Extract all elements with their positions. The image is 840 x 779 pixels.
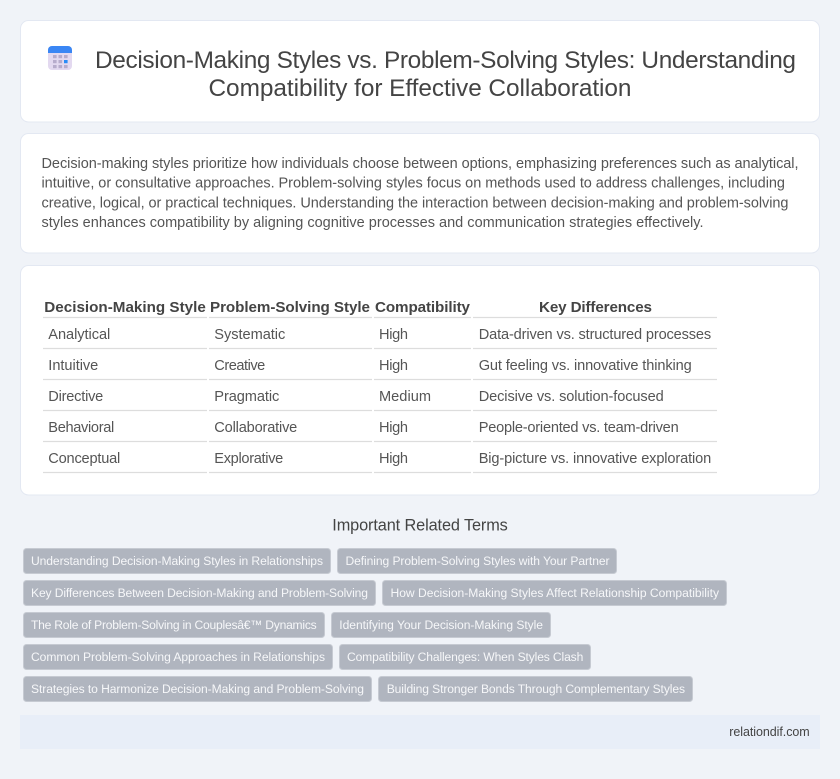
text block: description: styles enhances compatibility by aligning cognitive processes and communication strategies effectively. (42, 215, 704, 231)
tag: identifying your style: Identifying Your Decision-Making Style (339, 618, 543, 632)
related terms tags (24, 548, 726, 702)
heading: important related terms: Important Related Terms (332, 517, 508, 535)
table row: behavioral: Behavioral (48, 420, 114, 436)
table row: analytical: Data-driven vs. structured processes (479, 327, 711, 343)
table row: analytical: Analytical (48, 327, 110, 343)
table header: Decision-Making Style (44, 299, 206, 316)
table header: Key Differences (539, 299, 652, 316)
title (95, 47, 796, 102)
table header: Problem-Solving Style (210, 299, 370, 316)
table row: behavioral (48, 420, 679, 436)
table row: directive (48, 389, 664, 405)
tag: compatibility challenges (340, 644, 590, 670)
tag: compatibility challenges: Compatibility Challenges: When Styles Clash (347, 650, 583, 664)
table row: conceptual: Explorative (214, 451, 283, 467)
table row: behavioral: Collaborative (214, 420, 297, 436)
table row: directive: Decisive vs. solution-focused (479, 389, 664, 405)
table row: intuitive: Creative (214, 358, 265, 374)
table row: intuitive: High (379, 358, 408, 374)
table row: directive: Pragmatic (214, 389, 279, 405)
tag: understanding decision-making styles: Understanding Decision-Making Styles in Relationships (31, 554, 323, 568)
table row: analytical: High (379, 327, 408, 343)
tag: how decision-making styles affect compatibility: How Decision-Making Styles Affect Relationship Compatibility (390, 586, 720, 600)
text block: description: intuitive, or consultative approaches. Problem-solving styles focus on methods used to address challenges, including (42, 176, 785, 192)
tag: key differences: Key Differences Between Decision-Making and Problem-Solving (31, 586, 368, 600)
tag: how decision-making styles affect compatibility (382, 580, 726, 606)
tag: defining problem-solving styles (338, 548, 616, 574)
table rules (43, 318, 717, 472)
table row: directive: Medium (379, 389, 431, 405)
tag: identifying your style (332, 612, 550, 638)
tag: role of problem-solving (24, 612, 324, 638)
tag: defining problem-solving styles: Defining Problem-Solving Styles with Your Partner (346, 554, 610, 568)
panel: comparison table (20, 266, 820, 495)
tag: strategies to harmonize (24, 676, 372, 702)
icon: calendar (48, 46, 72, 70)
tag: strategies to harmonize: Strategies to Harmonize Decision-Making and Problem-Solving (31, 682, 364, 696)
tag: building stronger bonds (378, 676, 692, 702)
tag: understanding decision-making styles (24, 548, 330, 574)
tag: common approaches: Common Problem-Solving Approaches in Relationships (31, 650, 325, 664)
table row: analytical (48, 327, 711, 343)
table row: directive: Directive (48, 389, 103, 405)
panel: introduction text (20, 134, 820, 253)
title: Decision-Making Styles vs. Problem-Solving Styles: Understanding (95, 47, 796, 74)
table row: conceptual: Conceptual (48, 451, 120, 467)
tag: common approaches (24, 644, 332, 670)
table row: conceptual: Big-picture vs. innovative exploration (479, 451, 711, 467)
text block: description (42, 156, 798, 231)
tag: key differences (24, 580, 376, 606)
table row: behavioral: People-oriented vs. team-driven (479, 420, 679, 436)
text block: description: Decision-making styles prioritize how individuals choose between options, emphasizing preferences such as analytical, (42, 156, 798, 172)
tag: role of problem-solving: The Role of Problem-Solving in Couplesâ€™ Dynamics (31, 618, 317, 632)
table row: conceptual: High (379, 451, 408, 467)
footer (20, 715, 820, 749)
table row: analytical: Systematic (214, 327, 285, 343)
panel: title card (20, 20, 820, 122)
table row: intuitive (48, 358, 692, 374)
table row: intuitive: Intuitive (48, 358, 98, 374)
table row: conceptual (48, 451, 711, 467)
title: Compatibility for Effective Collaboration (208, 75, 632, 102)
table row: behavioral: High (379, 420, 408, 436)
table header (44, 299, 652, 316)
table header: Compatibility (375, 299, 471, 316)
tag: building stronger bonds: Building Stronger Bonds Through Complementary Styles (387, 682, 685, 696)
table row: intuitive: Gut feeling vs. innovative thinking (479, 358, 692, 374)
footer: relationdif.com (729, 725, 810, 739)
text block: description: creative, logical, or practical techniques. Understanding the interaction between decision-making and problem-solving (42, 195, 788, 211)
